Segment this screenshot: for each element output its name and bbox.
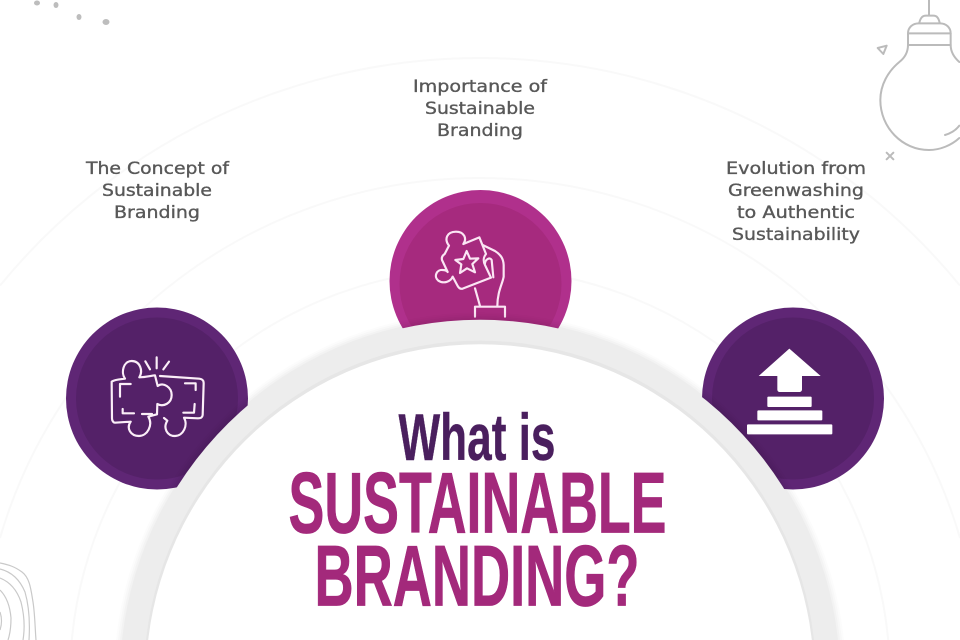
step: importance of sustainable branding xyxy=(390,77,572,372)
label: importance of sustainable branding: Sustainable xyxy=(425,99,535,119)
title: BRANDING? xyxy=(314,528,640,624)
label: the concept of sustainable branding: Branding xyxy=(114,203,200,223)
label: evolution from greenwashing to authentic sustainability: to Authentic xyxy=(737,203,855,223)
label: evolution from greenwashing to authentic sustainability: Evolution from xyxy=(726,159,866,179)
label: the concept of sustainable branding: Sustainable xyxy=(102,181,212,201)
badge: right purple circle xyxy=(702,308,884,490)
icon: light bulb top right xyxy=(878,0,959,159)
label: importance of sustainable branding xyxy=(413,77,548,141)
badge: center magenta circle xyxy=(390,190,572,372)
title xyxy=(288,400,666,624)
label: importance of sustainable branding: Branding xyxy=(437,121,523,141)
step: the concept of sustainable branding xyxy=(66,159,248,490)
step: evolution from greenwashing to authentic sustainability xyxy=(702,159,884,490)
label: the concept of sustainable branding xyxy=(85,159,230,223)
title: SUSTAINABLE xyxy=(288,456,666,552)
icon: puzzle pieces xyxy=(112,357,204,436)
label: importance of sustainable branding: Importance of xyxy=(413,77,548,97)
badge: left purple circle xyxy=(66,308,248,490)
icon: hand holding puzzle piece with star xyxy=(436,232,505,317)
title: What is xyxy=(398,400,556,474)
decorative dots top left xyxy=(34,0,110,25)
label: evolution from greenwashing to authentic sustainability: Sustainability xyxy=(732,225,860,245)
decorative topographic lines bottom left xyxy=(0,563,36,640)
label: evolution from greenwashing to authentic sustainability xyxy=(726,159,866,245)
central semicircle panel xyxy=(116,312,844,640)
label: the concept of sustainable branding: The Concept of xyxy=(85,159,230,179)
icon: arrow up over steps xyxy=(747,349,832,434)
label: evolution from greenwashing to authentic sustainability: Greenwashing xyxy=(728,181,864,201)
